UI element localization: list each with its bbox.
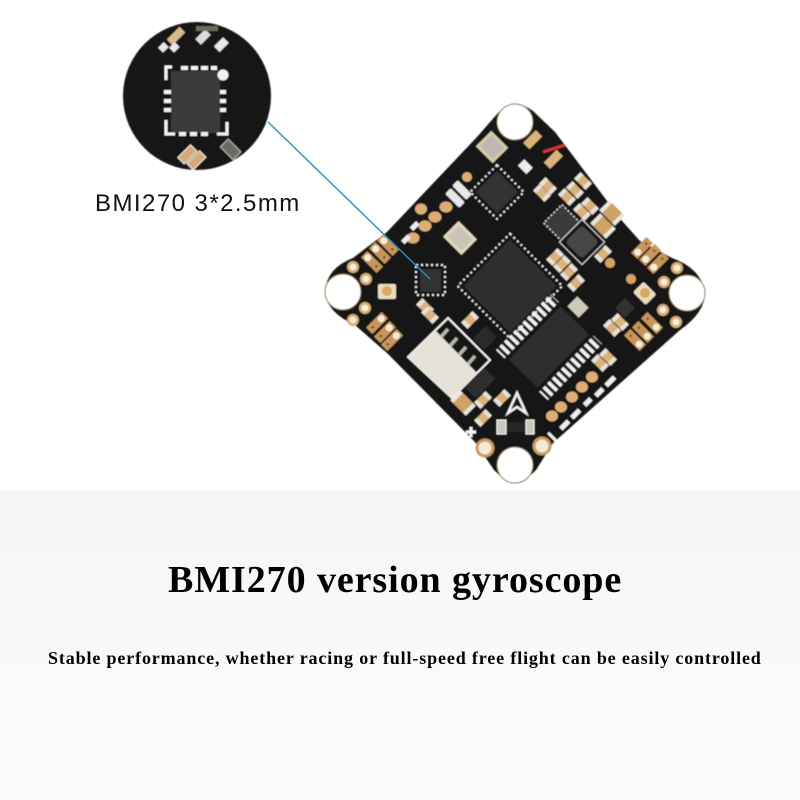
callout line [268,122,430,279]
top QFN chip [470,165,524,219]
magnified gyroscope chip [171,71,220,133]
capacitors [416,130,629,427]
board outline [325,104,705,481]
white connector [408,318,490,398]
gyroscope chip on board [416,265,445,295]
board [325,104,705,483]
title: BMI270 version gyroscope [168,559,622,601]
power chip [544,205,580,241]
main processor chip [458,234,562,338]
solder pad strips [361,234,669,351]
inductor [559,219,605,265]
red wire [543,145,565,152]
mounting holes [325,104,705,483]
callout label: BMI270 3*2.5mm [95,190,301,217]
panel: bottom caption background [0,491,800,800]
status LEDs [378,159,656,305]
round solder pads [347,172,683,458]
magnified components [158,26,241,170]
chip outline contacts [164,66,228,136]
secondary LQFP chip [496,294,602,400]
silkscreen marks [401,221,616,442]
crystals [443,131,589,318]
magnified chip circle [123,22,271,170]
subtitle: Stable performance, whether racing or full-speed free flight can be easily controlled [48,648,762,668]
circle background [123,22,271,170]
logo mark and resistor [466,393,534,437]
diode and small dark chips [465,298,635,399]
